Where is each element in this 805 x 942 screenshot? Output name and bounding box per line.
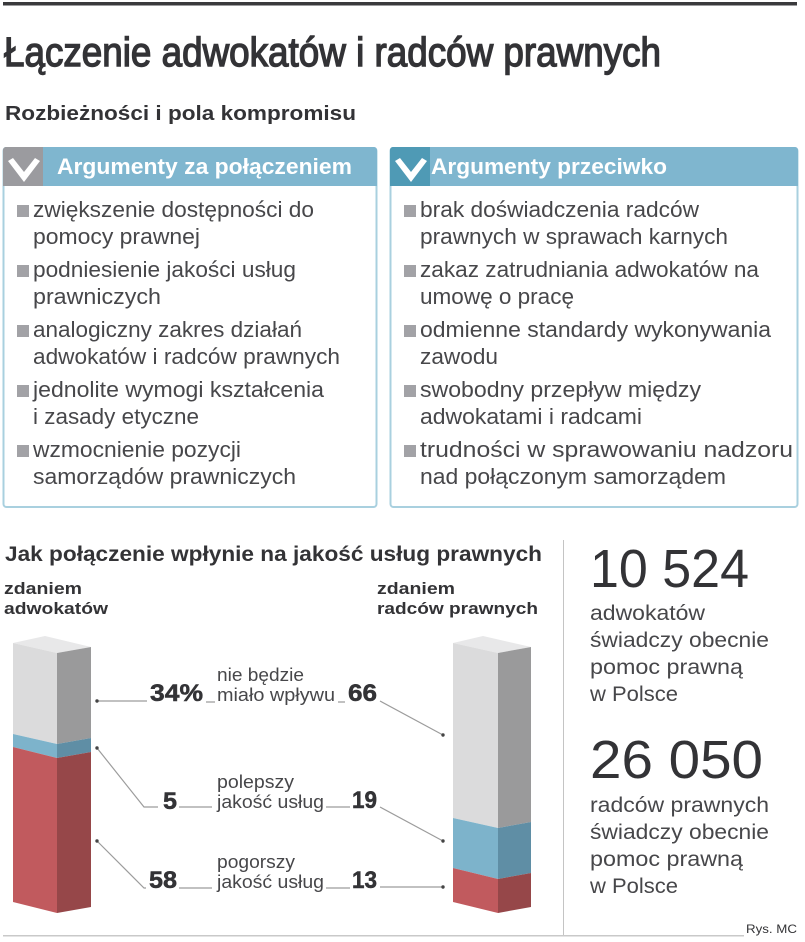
- bar: legal advisers: [453, 636, 531, 913]
- subtitle: Rozbieżności i pola kompromisu: [5, 103, 356, 125]
- row: worsens: jakość usług: [216, 872, 324, 892]
- stat: legal advisers: w Polsce: [589, 875, 678, 898]
- bar: lawyers: [13, 636, 91, 913]
- stat: legal advisers: 26 050: [590, 730, 763, 790]
- row: improves: 19: [352, 787, 377, 814]
- stat: advocates: pomoc prawną: [590, 656, 743, 679]
- title: Łączenie adwokatów i radców prawnych: [4, 29, 661, 75]
- row: no effect: 34%: [150, 680, 203, 707]
- row: improves: jakość usług: [216, 792, 324, 812]
- row: worsens: 13: [352, 867, 377, 894]
- list: arguments for: wzmocnienie pozycji: [32, 437, 241, 462]
- stat: legal advisers: świadczy obecnie: [590, 821, 769, 844]
- stat: advocates: świadczy obecnie: [590, 629, 769, 652]
- list: arguments for: jednolite wymogi kształcenia: [32, 377, 325, 402]
- list: arguments against: trudności w sprawowaniu nadzoru: [420, 437, 793, 462]
- list: arguments for: samorządów prawniczych: [33, 464, 296, 489]
- row: improves: 5: [163, 788, 177, 815]
- column label: legal advisers: zdaniem: [377, 579, 455, 598]
- list: arguments for: i zasady etyczne: [33, 404, 199, 429]
- stat: advocates: w Polsce: [589, 683, 678, 706]
- column label: lawyers: [4, 579, 109, 618]
- list: arguments against: prawnych w sprawach karnych: [420, 224, 728, 249]
- row: no effect: nie będzie: [217, 665, 304, 685]
- row: no effect: 66: [348, 680, 377, 707]
- list: arguments for: pomocy prawnej: [33, 224, 200, 249]
- list: arguments for: [17, 197, 340, 489]
- stat: legal advisers: pomoc prawną: [590, 848, 743, 871]
- list: arguments for: zwiększenie dostępności do: [33, 197, 314, 222]
- row: worsens: pogorszy: [217, 852, 295, 872]
- list: arguments against: zawodu: [420, 344, 498, 369]
- column label: legal advisers: radców prawnych: [377, 599, 538, 618]
- list: arguments against: nad połączonym samorządem: [420, 464, 726, 489]
- credit: Rys. MC: [746, 922, 797, 936]
- panel: arguments for: [3, 147, 377, 507]
- stat: advocates: [589, 539, 769, 706]
- list: arguments against: umowę o pracę: [420, 284, 574, 309]
- stat: legal advisers: radców prawnych: [590, 794, 769, 817]
- panel header: arguments against: [390, 147, 798, 186]
- list: arguments against: [404, 197, 793, 489]
- column label: lawyers: adwokatów: [4, 599, 109, 618]
- column label: lawyers: zdaniem: [4, 579, 82, 598]
- column label: legal advisers: [377, 579, 538, 618]
- panel header: arguments against: Argumenty przeciwko: [431, 154, 667, 179]
- list: arguments against: brak doświadczenia radców: [420, 197, 699, 222]
- row: improves: polepszy: [217, 772, 294, 792]
- list: arguments for: adwokatów i radców prawnych: [33, 344, 340, 369]
- list: arguments for: analogiczny zakres działań: [33, 317, 302, 342]
- list: arguments for: prawniczych: [33, 284, 161, 309]
- row: no effect: [150, 665, 377, 707]
- panel header: arguments for: Argumenty za połączeniem: [57, 154, 352, 179]
- row: improves: [163, 772, 377, 815]
- stat: legal advisers: [589, 730, 769, 898]
- stat: advocates: 10 524: [590, 539, 749, 599]
- panel: arguments against: [390, 147, 798, 507]
- stat: advocates: adwokatów: [590, 602, 706, 625]
- list: arguments for: podniesienie jakości usług: [33, 257, 296, 282]
- panel header: arguments for: [3, 147, 377, 186]
- list: arguments against: swobodny przepływ między: [420, 377, 701, 402]
- list: arguments against: adwokatami i radcami: [420, 404, 642, 429]
- row: worsens: 58: [149, 867, 177, 894]
- row: worsens: [149, 852, 377, 894]
- chart heading: Jak połączenie wpłynie na jakość usług prawnych: [5, 543, 542, 566]
- list: arguments against: zakaz zatrudniania adwokatów na: [420, 257, 760, 282]
- list: arguments against: odmienne standardy wykonywania: [420, 317, 772, 342]
- leader lines: [95, 699, 445, 889]
- row: no effect: miało wpływu: [217, 685, 335, 705]
